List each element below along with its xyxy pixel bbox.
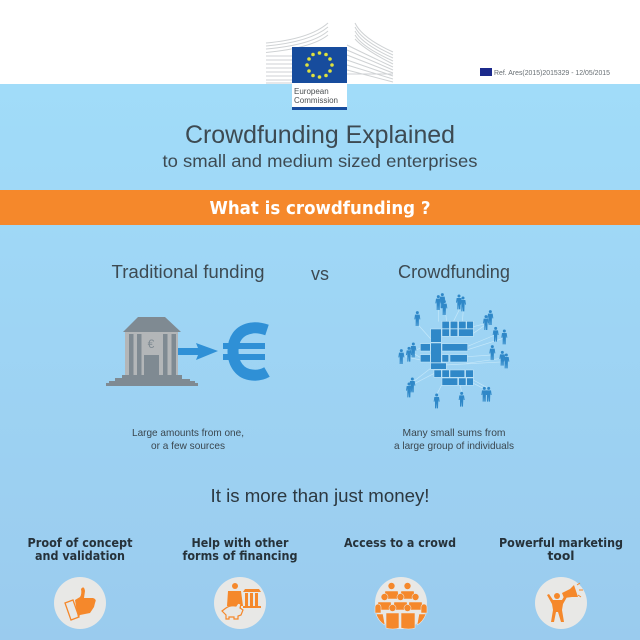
header: European Commission logo [266, 23, 393, 110]
reference stamp: Ref. Ares(2015)2015329 - 12/05/2015 [494, 68, 610, 77]
title: Crowdfunding Explained [185, 121, 455, 149]
crowd illustration [398, 293, 509, 408]
icon: thumbs up [54, 577, 106, 629]
subtitle: to small and medium sized enterprises [162, 151, 478, 171]
crowd people [398, 293, 509, 408]
section heading: It is more than just money! [210, 485, 430, 506]
icon: bank [106, 317, 198, 386]
benefit 3: access to a crowd [344, 536, 456, 629]
caption: traditional funding [132, 427, 244, 452]
benefit 2: other financing: Help with other [192, 536, 289, 550]
caption: traditional funding: or a few sources [151, 440, 225, 452]
benefit 4: marketing tool [499, 536, 623, 629]
heading: vs: vs [311, 264, 329, 284]
header: European Commission logo: European [294, 87, 329, 96]
benefit 4: marketing tool: tool [548, 549, 574, 563]
header: European Commission logo: Commission [294, 96, 338, 105]
EU flag [292, 47, 347, 83]
icon: euro [223, 328, 267, 375]
heading: traditional funding: Traditional funding [112, 262, 264, 282]
logo label [292, 83, 347, 110]
benefit 2: other financing: forms of financing [182, 549, 298, 563]
arrow [178, 343, 218, 360]
benefit 1: proof of concept: and validation [35, 549, 125, 563]
icon: investor, piggy bank and bank [214, 577, 266, 629]
logo building [266, 23, 393, 83]
caption: crowdfunding: a large group of individuals [394, 440, 514, 452]
benefit 1: proof of concept [28, 536, 133, 629]
benefit 1: proof of concept: Proof of concept [28, 536, 133, 550]
benefit 2: other financing [182, 536, 298, 629]
icon: bank: € [148, 337, 155, 351]
caption: traditional funding: Large amounts from one, [132, 427, 244, 439]
connection lines [405, 308, 507, 393]
flag stars [305, 51, 334, 79]
euro blocks [420, 321, 473, 385]
orange banner [0, 190, 640, 225]
heading: crowdfunding: Crowdfunding [398, 262, 510, 282]
caption: crowdfunding: Many small sums from [402, 427, 506, 439]
benefit 4: marketing tool: Powerful marketing [499, 536, 623, 550]
icon: person with megaphone [535, 577, 587, 629]
icon: crowd [375, 577, 427, 629]
benefit 3: access to a crowd: Access to a crowd [344, 536, 456, 550]
caption: crowdfunding [394, 427, 514, 452]
orange banner: What is crowdfunding ? [210, 199, 430, 219]
